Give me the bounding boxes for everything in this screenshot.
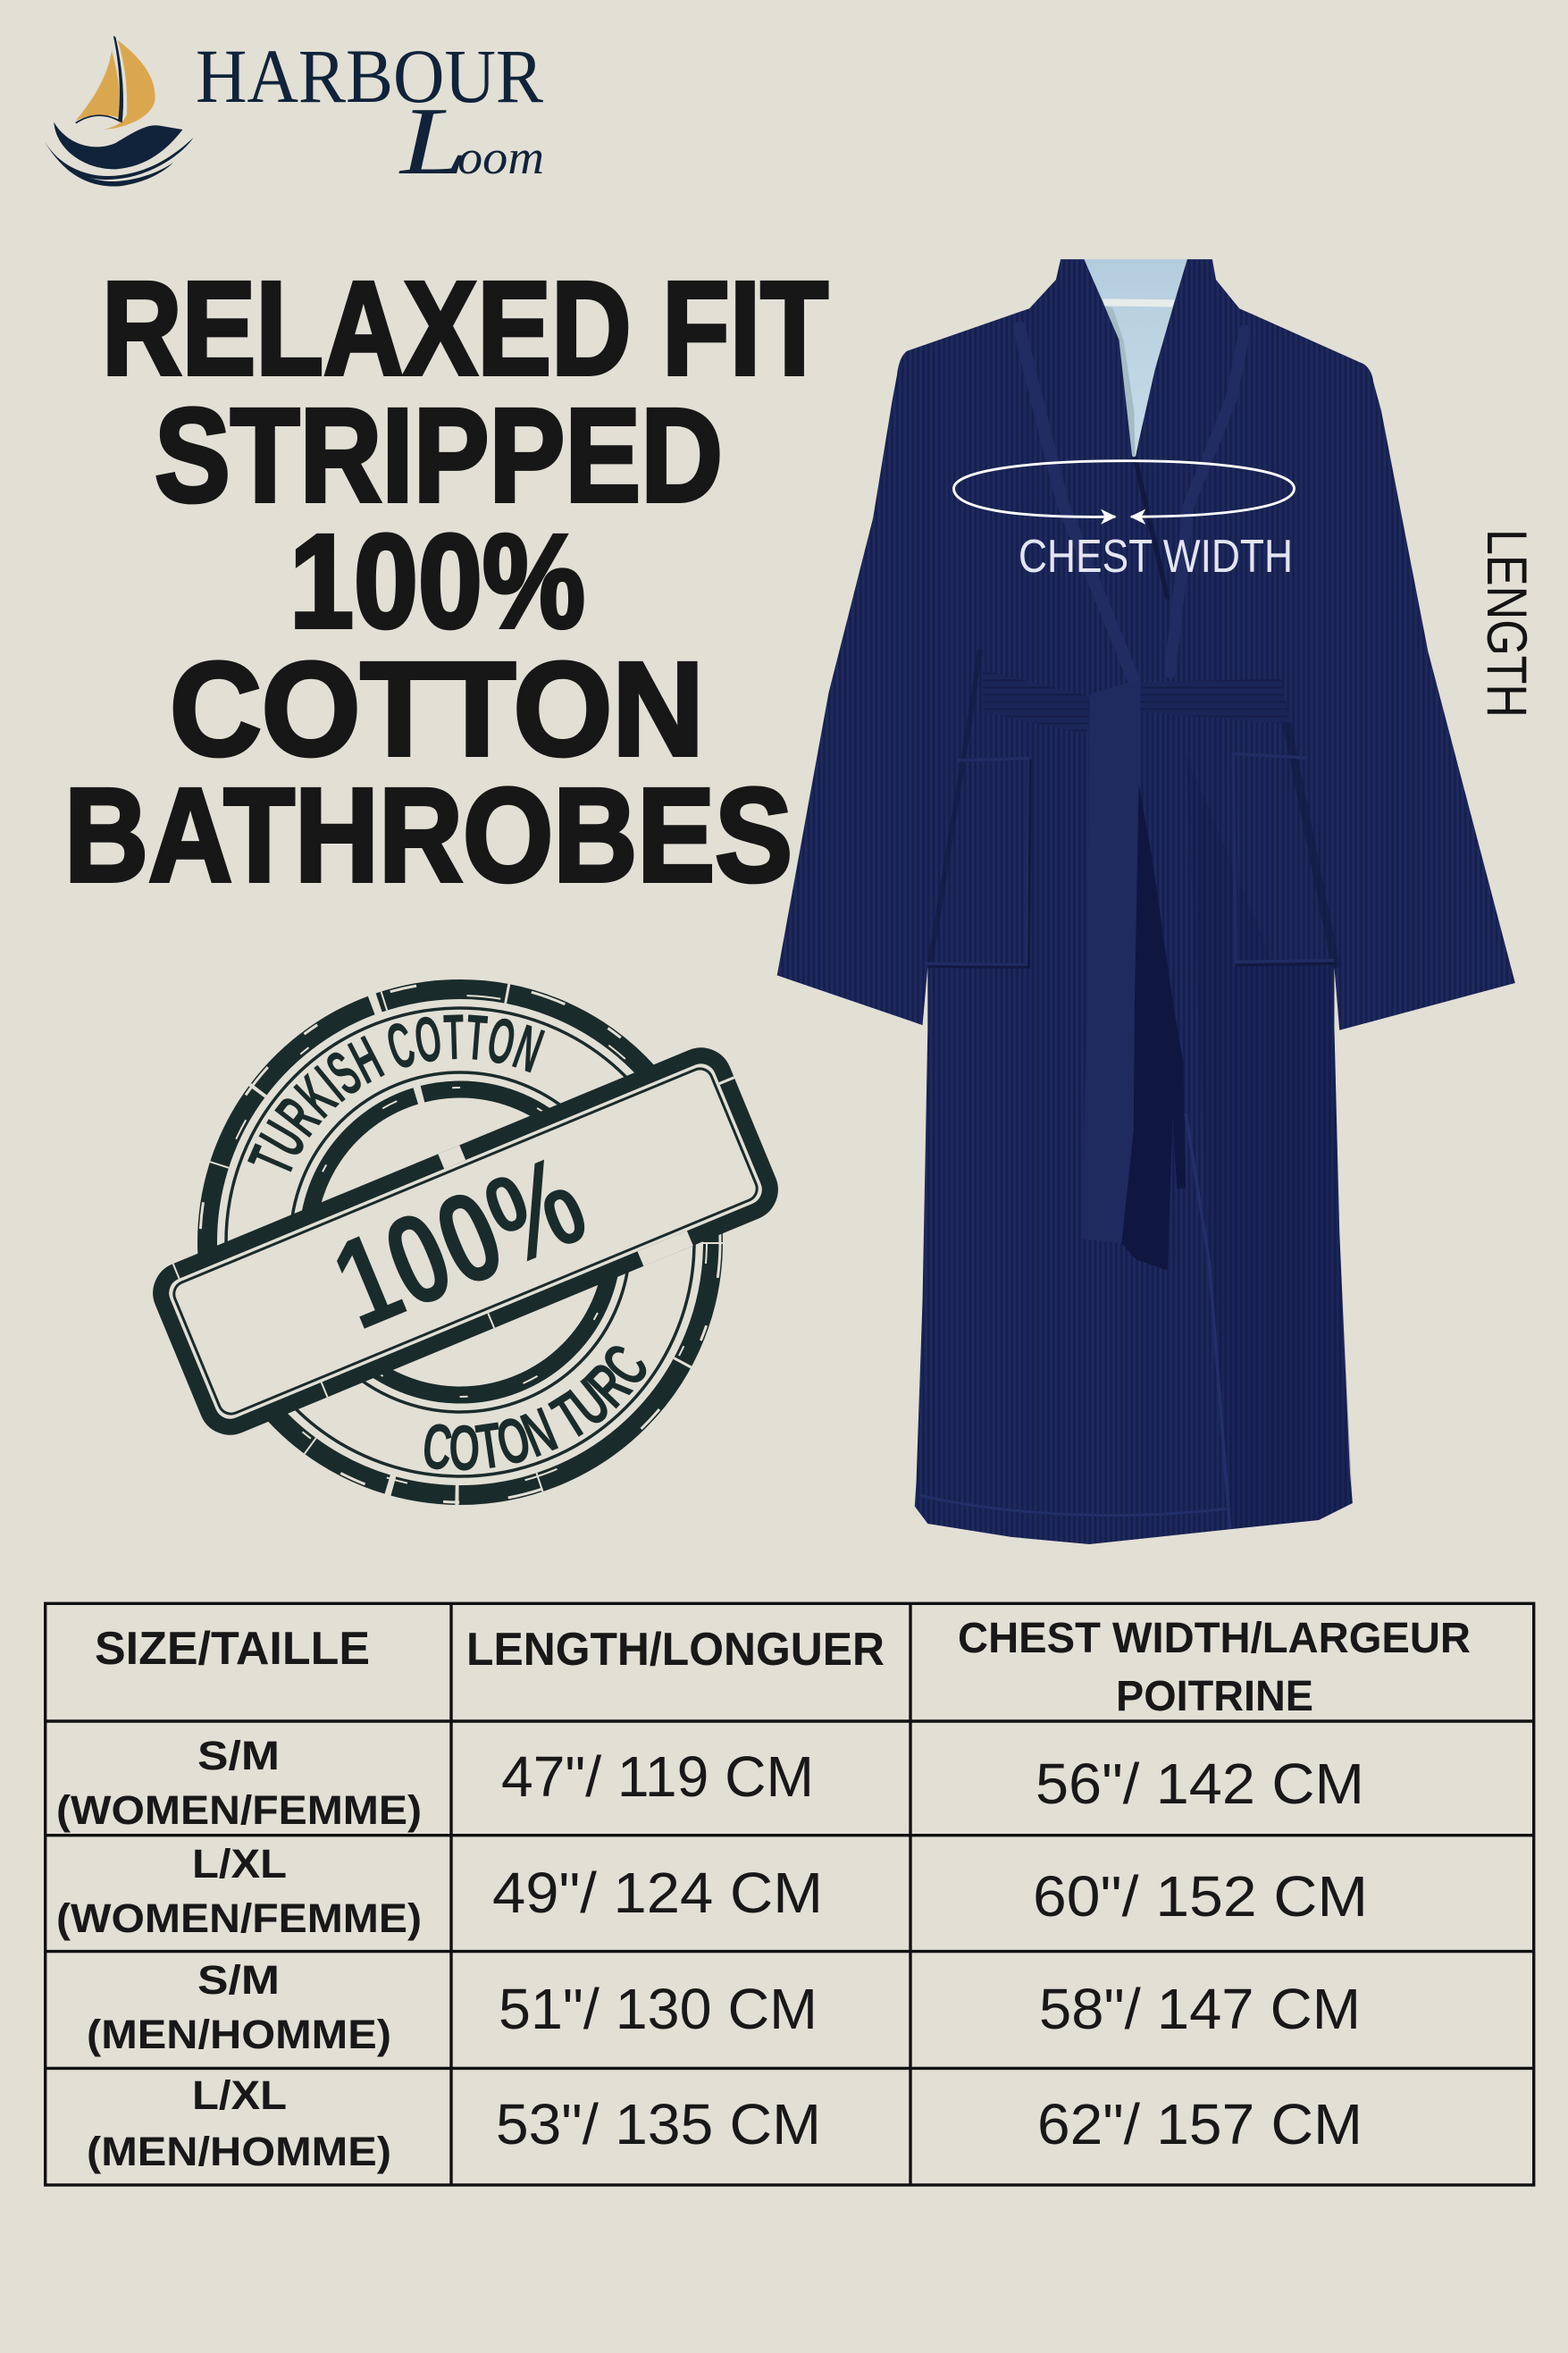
table header: SIZE/TAILLE <box>95 1623 370 1675</box>
stamp number: 100% <box>314 1129 604 1357</box>
row: L/XL men: 62"/ 157 CM <box>1037 2092 1363 2156</box>
row: S/M women: 56"/ 142 CM <box>1036 1752 1364 1816</box>
title: BATHROBES <box>64 761 792 910</box>
brand script: Loom: oom <box>457 130 544 184</box>
stamp ring wear <box>200 982 720 1502</box>
row: S/M men: S/M <box>197 1957 280 2003</box>
title: COTTON <box>170 634 704 784</box>
hem <box>920 1495 1229 1516</box>
lapels <box>1019 327 1245 680</box>
robe illustration <box>777 259 1515 1544</box>
stamp rings <box>207 989 713 1495</box>
brand script: Loom <box>398 88 544 195</box>
row: L/XL women: L/XL <box>192 1841 287 1887</box>
row: S/M men: 58"/ 147 CM <box>1039 1977 1361 2041</box>
brand name: HARBOUR <box>196 33 544 119</box>
stamp text paths <box>277 1059 643 1242</box>
chest measure ellipse with arrows <box>954 461 1294 525</box>
mannequin neck and undershirt <box>1084 259 1187 458</box>
title: RELAXED FIT <box>102 254 828 403</box>
pockets <box>925 753 1336 967</box>
row: L/XL women: 49"/ 124 CM <box>492 1861 823 1925</box>
table grid <box>46 1603 1534 2185</box>
stamp text: coton turc: COTON TURC <box>423 1346 647 1471</box>
stamp: 100% Turkish cotton <box>153 979 778 1505</box>
row: S/M women: (WOMEN/FEMME) <box>56 1787 422 1833</box>
row: S/M women <box>56 1733 1364 1833</box>
row: S/M men: 51"/ 130 CM <box>499 1977 818 2041</box>
stamp text path lower <box>232 1242 688 1470</box>
table header <box>95 1615 1471 1720</box>
label: chest width: CHEST WIDTH <box>1019 531 1293 583</box>
row: S/M women: S/M <box>197 1733 280 1778</box>
row: L/XL men: L/XL <box>192 2072 287 2118</box>
row: L/XL women <box>56 1841 1368 1941</box>
table header: LENGTH/LONGUER <box>466 1624 885 1676</box>
row: S/M men <box>87 1957 1361 2057</box>
row: L/XL men: (MEN/HOMME) <box>87 2129 391 2174</box>
icon: sailboat on waves <box>45 36 194 187</box>
sleeve shadows <box>930 651 1336 964</box>
row: L/XL men <box>87 2072 1363 2174</box>
table header: POITRINE <box>1116 1673 1313 1720</box>
logo: Harbour Loom <box>45 33 544 195</box>
title: STRIPPED <box>155 381 723 530</box>
title <box>64 254 828 910</box>
stamp banner <box>154 1048 777 1434</box>
row: L/XL men: 53"/ 135 CM <box>496 2092 821 2156</box>
label: length: LENGTH <box>1475 529 1538 718</box>
row: S/M women: 47"/ 119 CM <box>501 1744 814 1809</box>
robe body and sleeves <box>777 259 1515 1544</box>
lower right wrap panel <box>1186 754 1353 1529</box>
size table <box>46 1603 1534 2185</box>
brand script: Loom: L <box>398 88 467 195</box>
stamp text: Turkish cotton: TURKISH COTTON <box>247 1014 545 1172</box>
row: L/XL women: (WOMEN/FEMME) <box>56 1895 422 1941</box>
belt <box>983 670 1291 1529</box>
row: L/XL women: 60"/ 152 CM <box>1033 1864 1368 1929</box>
table header: CHEST WIDTH/LARGEUR <box>958 1615 1471 1662</box>
row: S/M men: (MEN/HOMME) <box>87 2012 391 2057</box>
title: 100% <box>289 507 585 656</box>
